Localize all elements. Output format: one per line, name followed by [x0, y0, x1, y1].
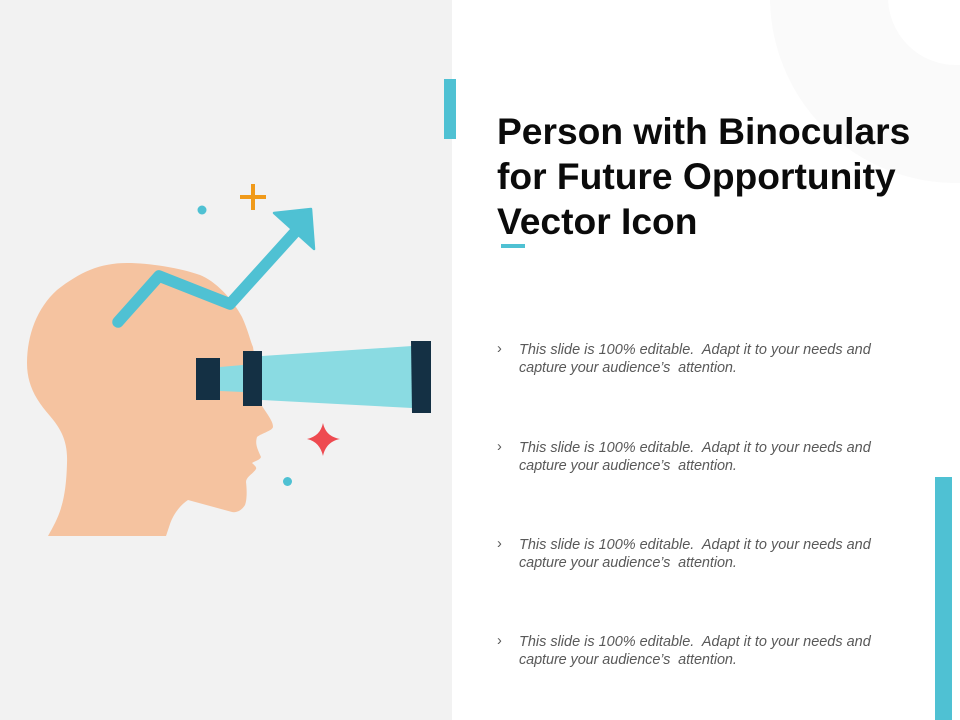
decorative corner ring — [452, 0, 960, 720]
bullet text 2: › — [497, 439, 502, 455]
title: Person with Binoculars — [497, 110, 910, 152]
binocular front lens — [411, 341, 431, 413]
bullet text 1: This slide is 100% editable. Adapt it to your needs and capture your audience’s attention. — [519, 342, 871, 376]
bullet text 4: This slide is 100% editable. Adapt it to your needs and capture your audience’s attention. — [519, 634, 871, 668]
bullet text 2: This slide is 100% editable. Adapt it to your needs and capture your audience’s attention. — [519, 440, 871, 474]
binocular barrel — [262, 346, 412, 408]
orange plus — [240, 184, 266, 210]
title: for Future Opportunity — [497, 155, 896, 197]
binocular eyepiece — [196, 358, 220, 400]
bullet text 1: › — [497, 341, 502, 357]
teal dot top — [198, 206, 206, 214]
bullet text 3: This slide is 100% editable. Adapt it to your needs and capture your audience’s attention. — [519, 537, 871, 571]
teal accent bar at panel edge — [444, 79, 456, 139]
binocular middle ring — [243, 351, 262, 406]
right teal accent bar — [935, 477, 952, 720]
teal dot bottom — [283, 477, 292, 486]
left grey panel — [0, 0, 452, 720]
title: Vector Icon — [497, 200, 697, 242]
title underline accent — [501, 244, 525, 248]
bullet text 4: › — [497, 633, 502, 649]
title — [497, 110, 910, 242]
bullet text 3: › — [497, 536, 502, 552]
illustration: person with binoculars — [27, 184, 431, 536]
growth arrow — [118, 209, 314, 322]
red sparkle — [307, 423, 340, 456]
beam of binoculars — [220, 365, 243, 392]
head silhouette — [27, 263, 273, 536]
